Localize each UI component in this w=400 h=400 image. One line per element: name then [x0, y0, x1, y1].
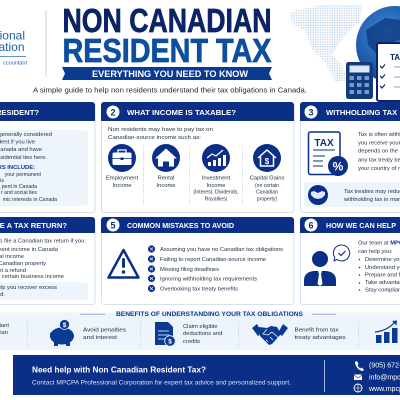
call to action banner: Need help with Non Canadian Resident Tax?: [32, 364, 206, 374]
benefits strip: credits: [183, 339, 200, 345]
icon: employment briefcase: [108, 144, 136, 172]
panel 2: what income is taxable: [101, 102, 294, 212]
benefits strip: [0, 311, 400, 350]
benefits heading: BENEFITS OF UNDERSTANDING YOUR TAX OBLIGATIONS: [116, 311, 303, 318]
contact details: [354, 361, 400, 393]
icon: capital gains house: [253, 144, 281, 172]
icon: handshake badge: [308, 185, 328, 205]
benefits strip: Claim eligible: [183, 324, 217, 330]
panel 2: what income is taxable: Income: [156, 183, 176, 189]
mistakes list: Missing filing deadlines: [160, 267, 219, 273]
panel 5: common mistakes: 5: [110, 220, 116, 230]
icon: growth chart: [375, 320, 398, 343]
panel 5: common mistakes: COMMON MISTAKES TO AVOID: [127, 221, 234, 230]
icon: piggy bank: [50, 320, 74, 346]
icon: tax document: [308, 132, 348, 176]
call to action banner: Contact MPCPA Professional Corporation for expert tax advice and personalized support.: [32, 380, 291, 386]
panel 6: how we can help: [300, 217, 400, 304]
call to action banner: [13, 355, 400, 395]
panel 2: what income is taxable: 2: [110, 107, 116, 117]
benefits strip: Benefit from tax: [294, 328, 339, 334]
title: [62, 2, 272, 69]
title: RESIDENT TAX: [62, 32, 272, 69]
benefits strip: treaty advantages: [294, 335, 346, 341]
panel 2: what income is taxable: Income: [206, 183, 226, 189]
mistakes list: Overlooking tax treaty benefits: [160, 286, 238, 292]
panel 2: what income is taxable: (on certain: [255, 183, 279, 189]
benefits strip: Avoid penalties: [83, 328, 126, 334]
icon: tax document: %: [333, 160, 344, 174]
panel 3: withholding tax: WITHHOLDING TAX: [326, 108, 397, 117]
panel 2: what income is taxable: Investment: [202, 176, 231, 182]
benefits strip: deductions and: [183, 331, 222, 337]
illustration: globe, calculator, clipboard: [290, 5, 400, 101]
panel 6: how we can help: 6: [308, 220, 314, 230]
panel 6: how we can help: HOW WE CAN HELP: [326, 221, 396, 230]
icon: tax document: TAX: [314, 138, 334, 149]
icon: capital gains house: $: [265, 157, 270, 166]
panel 2: what income is taxable: Employment: [106, 176, 138, 182]
ribbon subtitle: EVERYTHING YOU NEED TO KNOW: [92, 69, 249, 79]
panel 4: who must file a tax return: [0, 217, 95, 304]
panel 1: who is a non resident: mic interests in Canada: [3, 197, 57, 203]
icon: handshake: [252, 324, 288, 345]
panel 2: what income is taxable: Income: [112, 183, 132, 189]
icon: warning triangle: [108, 250, 138, 278]
logo: [0, 10, 46, 77]
panel 5: common mistakes: [101, 217, 294, 304]
illustration: globe, calculator, clipboard: TA: [390, 53, 400, 62]
icon: piggy bank: $: [63, 322, 67, 329]
panel 2: what income is taxable: Rental: [158, 176, 174, 182]
panel 2: what income is taxable: Canadian: [256, 190, 278, 196]
panel 3: withholding tax: 3: [308, 107, 314, 117]
logo: ional: [0, 28, 25, 42]
panel 2: what income is taxable: Capital Gains: [250, 176, 284, 182]
icon: advisor with speech bubble: [304, 245, 350, 286]
panel 1: who is a non resident: is: [0, 178, 4, 184]
ribbon subtitle: [62, 67, 272, 80]
icon: rental house: [152, 144, 180, 172]
tagline: A simple guide to help non residents understand their tax obligations in Canada.: [33, 86, 307, 94]
panel 6: how we can help: can help you:: [358, 249, 393, 255]
panel 1: who is a non resident: your permanent: [5, 172, 42, 178]
title: NON CANADIAN: [62, 2, 272, 39]
icon: deductions document: $: [168, 338, 172, 346]
panel 2: what income is taxable: property): [257, 196, 277, 202]
panel 3: withholding tax: [300, 102, 400, 212]
icon: deductions document: [155, 322, 175, 346]
mistakes list: [148, 245, 283, 292]
mistakes list: Assuming you have no Canadian tax obligations: [160, 247, 283, 253]
panel 2: what income is taxable: WHAT INCOME IS TAXABLE?: [127, 108, 236, 117]
panel 2: what income is taxable: Canadian-source income such as:: [108, 135, 201, 141]
panel 1: who is a non resident: pent in Canada: [2, 184, 37, 190]
panel 2: what income is taxable: Royalties): [205, 196, 228, 202]
panel 2: what income is taxable: Non residents may have to pay tax on: [108, 127, 213, 133]
benefits strip: and interest: [83, 335, 117, 341]
panel 1: who is a non resident: [0, 102, 95, 212]
panel 1: who is a non resident: r and social ties: [1, 190, 37, 196]
mistakes list: Failing to report Canadian-source income: [160, 257, 266, 263]
icon: investment chart: [202, 144, 230, 172]
mistakes list: Ignoring withholding tax requirements: [160, 276, 257, 282]
panel 2: what income is taxable: (Interest, Dividends,: [193, 190, 239, 196]
logo: ccountant: [3, 60, 27, 66]
